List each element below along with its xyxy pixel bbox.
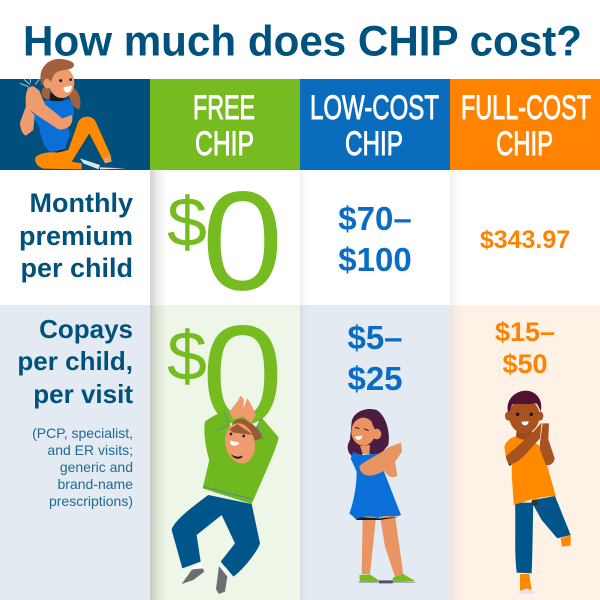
low-cost premium: $100	[338, 241, 412, 278]
low-cost copay: $5–	[347, 319, 403, 356]
full-cost premium: $343.97	[480, 226, 570, 254]
header: empty navy cell	[0, 79, 150, 170]
header: low-cost CHIP: LOW-COST	[310, 89, 439, 127]
header: free CHIP	[150, 79, 300, 170]
header: low-cost CHIP	[300, 79, 450, 170]
row label: copays per child, per visit	[17, 314, 133, 409]
free copay: $0	[167, 296, 283, 454]
header: full-cost CHIP: CHIP	[496, 125, 553, 163]
full-cost copay: $15–	[495, 317, 555, 347]
free premium: $0: 0	[202, 162, 283, 320]
note: visit types: (PCP, specialist,	[32, 425, 133, 441]
illustration: girl in blue dress	[348, 409, 416, 583]
illustration: boy in orange shirt	[504, 391, 571, 594]
note: visit types: generic and	[60, 459, 133, 475]
row label: monthly premium per child: Monthly	[30, 188, 133, 218]
row label: copays per child, per visit: Copays	[39, 314, 133, 344]
header: low-cost CHIP: CHIP	[345, 125, 403, 163]
note: visit types: and ER visits;	[47, 442, 133, 458]
free copay: $0: 0	[202, 296, 283, 454]
row label: monthly premium per child: per child	[20, 253, 133, 283]
low-cost copay	[347, 319, 403, 397]
low-cost premium: $70–	[338, 200, 412, 237]
note: visit types: prescriptions)	[49, 493, 133, 509]
free premium: $0: $	[167, 183, 207, 261]
row label: monthly premium per child: premium	[19, 221, 133, 251]
note: visit types	[32, 425, 133, 509]
free copay: $0: $	[167, 317, 207, 395]
header: free CHIP: CHIP	[195, 125, 254, 163]
row label: copays per child, per visit: per child,	[17, 346, 133, 376]
note: visit types: brand-name	[58, 476, 133, 492]
low-cost premium	[338, 200, 412, 278]
full-cost copay: $50	[502, 349, 548, 379]
table background	[0, 170, 600, 600]
header: full-cost CHIP	[450, 79, 600, 170]
free premium: $0	[167, 162, 283, 320]
illustration: boy hanging from zero	[172, 396, 279, 594]
row label: copays per child, per visit: per visit	[33, 379, 133, 409]
illustration: sitting girl clapping	[20, 59, 127, 169]
row label: monthly premium per child	[19, 188, 133, 283]
header: free CHIP: FREE	[193, 89, 255, 127]
low-cost copay: $25	[347, 360, 403, 397]
title: How much does CHIP cost?	[23, 18, 582, 66]
full-cost copay	[495, 317, 555, 379]
